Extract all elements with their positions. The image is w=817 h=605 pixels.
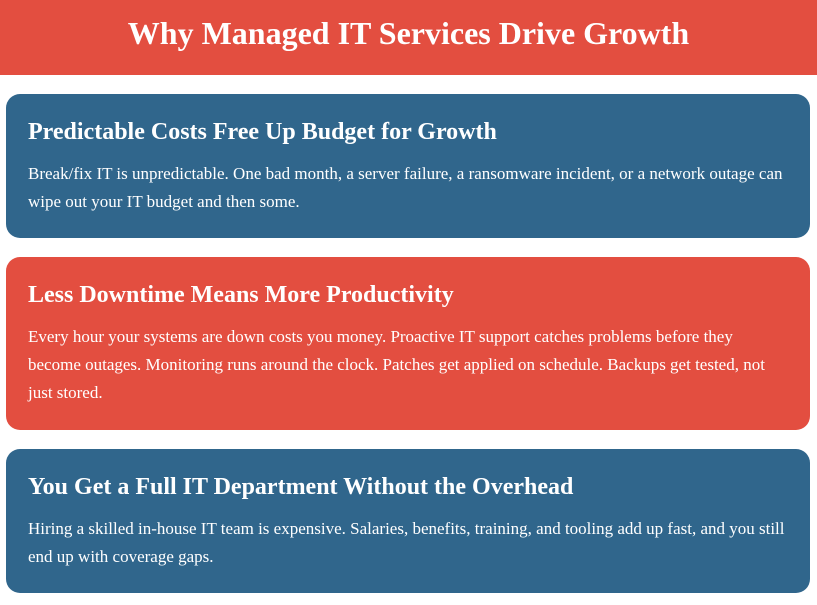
panel: full IT department — [6, 449, 810, 593]
heading: You Get a Full IT Department Without the Overhead — [28, 474, 573, 500]
heading: Predictable Costs Free Up Budget for Growth — [28, 119, 497, 145]
panel: predictable costs — [6, 94, 810, 238]
text block: Every hour your systems are down costs you money. Proactive IT support catches problems before they become outages. Monitoring runs around the clock. Patches get applied on schedule. Backups get tested, not just stored. — [28, 327, 765, 402]
heading: Less Downtime Means More Productivity — [28, 282, 454, 308]
text block: Hiring a skilled in-house IT team is expensive. Salaries, benefits, training, and tooling add up fast, and you still end up with coverage gaps. — [28, 519, 785, 566]
panel: less downtime — [6, 257, 810, 430]
text block: Break/fix IT is unpredictable. One bad month, a server failure, a ransomware incident, or a network outage can wipe out your IT budget and then some. — [28, 164, 782, 211]
title — [0, 0, 817, 75]
title: Why Managed IT Services Drive Growth — [128, 15, 689, 51]
